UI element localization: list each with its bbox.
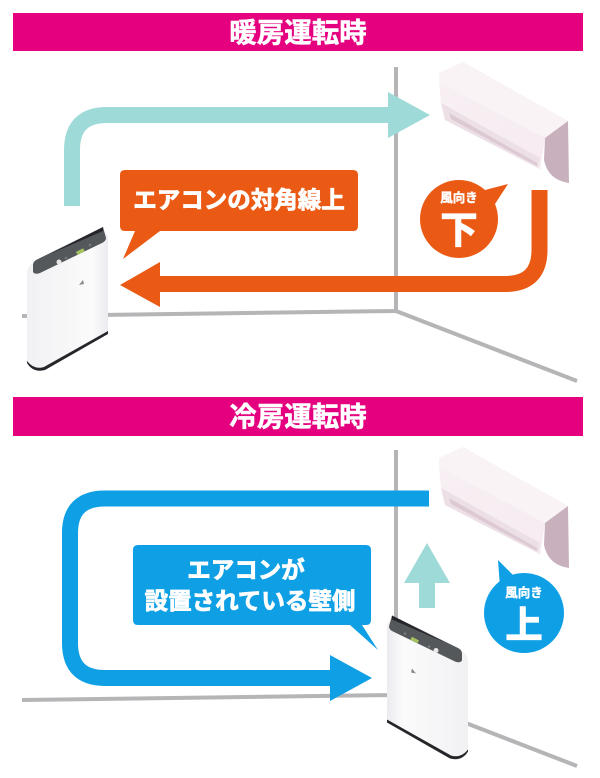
room wall lines xyxy=(22,450,577,766)
heading: cooling xyxy=(13,397,583,436)
air purifier xyxy=(27,227,108,371)
heading: heating: 暖房運転時 xyxy=(229,17,367,48)
heading: heating xyxy=(13,13,583,51)
orange arrow: downward airflow xyxy=(120,190,540,307)
callout: diagonal to air conditioner: エアコンの対角線上 xyxy=(133,187,345,213)
panel: heating operation xyxy=(13,13,583,381)
badge: wind direction down xyxy=(420,180,508,258)
callout: air conditioner wall side: 設置されている壁側 xyxy=(145,588,355,614)
air purifier xyxy=(387,616,468,759)
room wall lines xyxy=(22,67,577,381)
badge: wind direction down: 下 xyxy=(440,210,478,251)
blue arrow: upward airflow xyxy=(70,498,429,701)
badge: wind direction up: 風向き xyxy=(505,585,543,600)
callout: air conditioner wall side xyxy=(133,545,378,650)
heading: cooling: 冷房運転時 xyxy=(229,401,367,432)
teal arrow: warm air xyxy=(72,92,430,206)
air conditioner xyxy=(439,447,569,568)
badge: wind direction down: 風向き xyxy=(440,190,478,205)
teal up arrow xyxy=(404,543,450,608)
callout: air conditioner wall side: エアコンが xyxy=(187,556,305,583)
badge: wind direction up xyxy=(484,560,564,653)
badge: wind direction up: 上 xyxy=(506,605,542,646)
panel: cooling operation xyxy=(13,397,583,766)
callout: diagonal to air conditioner xyxy=(120,170,358,259)
air conditioner xyxy=(439,62,569,183)
